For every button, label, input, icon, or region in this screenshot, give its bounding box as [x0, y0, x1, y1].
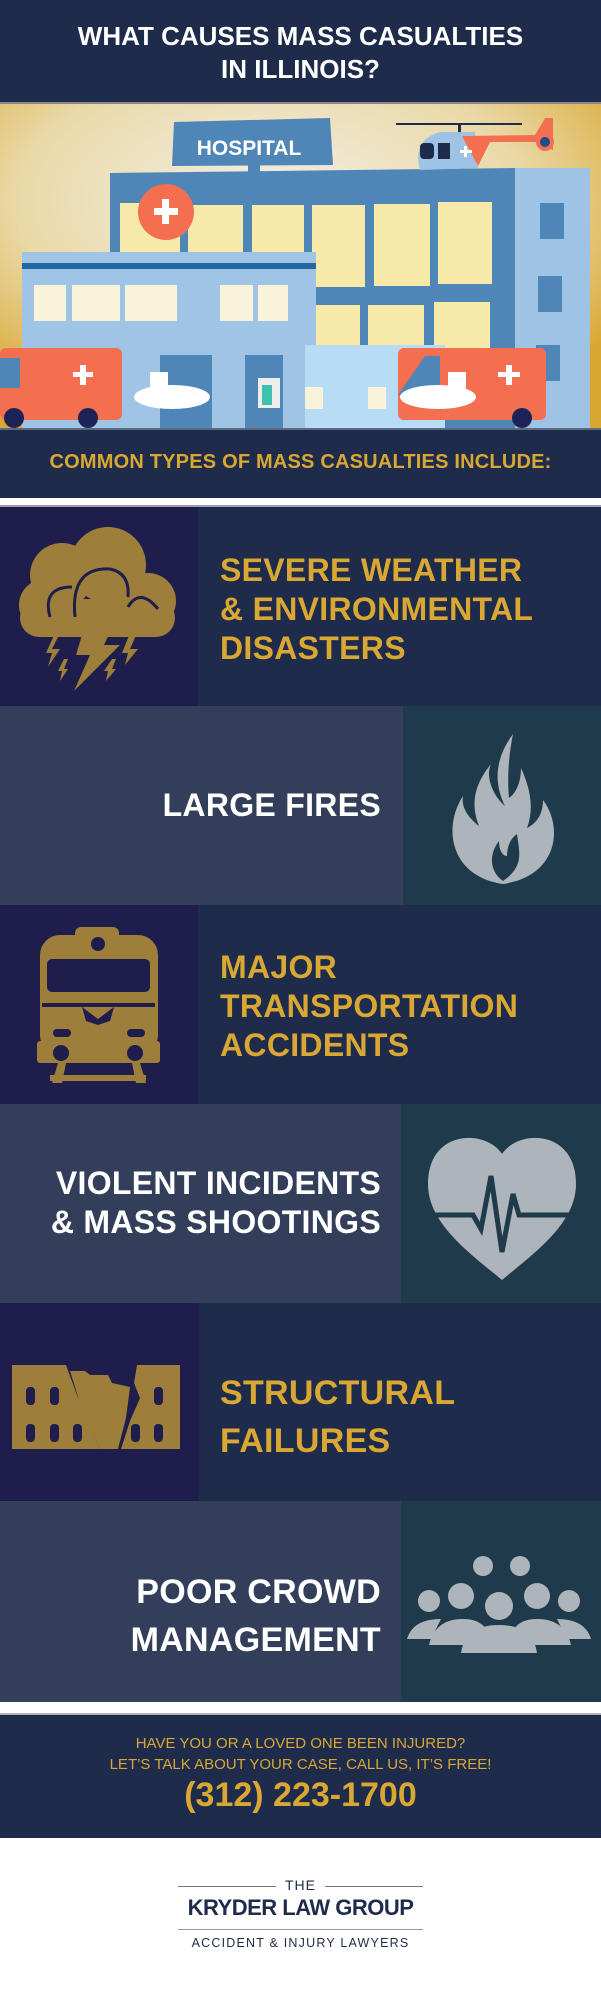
- cta text: LET’S TALK ABOUT YOUR CASE, CALL US, IT’S FREE!: [110, 1756, 491, 1773]
- text: transportation: MAJOR: [220, 949, 337, 985]
- text: crowd management: POOR CROWD: [136, 1573, 381, 1611]
- helicopter: [396, 123, 522, 125]
- text: severe weather: [220, 552, 533, 666]
- title: IN ILLINOIS?: [221, 54, 380, 84]
- text: violent incidents: VIOLENT INCIDENTS: [56, 1165, 381, 1201]
- logo: ACCIDENT & INJURY LAWYERS: [192, 1936, 409, 1950]
- panel: violent incidents: [0, 1104, 601, 1303]
- text: violent incidents: & MASS SHOOTINGS: [51, 1204, 381, 1240]
- cta text: [110, 1735, 491, 1773]
- cta text: HAVE YOU OR A LOVED ONE BEEN INJURED?: [136, 1735, 465, 1752]
- logo: KRYDER LAW GROUP: [188, 1895, 413, 1920]
- text: transportation: ACCIDENTS: [220, 1027, 409, 1063]
- panel: severe weather: [0, 507, 601, 706]
- text: crowd management: [131, 1573, 381, 1659]
- title: WHAT CAUSES MASS CASUALTIES: [78, 21, 523, 51]
- panel: transportation: [0, 905, 601, 1104]
- panel: poor crowd management: [0, 1501, 601, 1702]
- icon: heart with pulse: [401, 1104, 601, 1303]
- text: severe weather: SEVERE WEATHER: [220, 552, 522, 588]
- hero illustration: hospital: [0, 102, 601, 430]
- hero illustration: hospital: HOSPITAL: [197, 137, 301, 160]
- text: structural failures: [220, 1374, 455, 1460]
- text: large fires: LARGE FIRES: [163, 787, 381, 823]
- text: severe weather: DISASTERS: [220, 630, 406, 666]
- icon: collapsed building: [0, 1303, 199, 1501]
- subheading band: [0, 430, 601, 498]
- icon: fire: [403, 706, 601, 905]
- icon: crowd: [401, 1501, 601, 1702]
- text: severe weather: & ENVIRONMENTAL: [220, 591, 533, 627]
- logo: [178, 1877, 423, 1950]
- title band: [0, 0, 601, 102]
- subheading: COMMON TYPES OF MASS CASUALTIES INCLUDE:: [49, 451, 552, 473]
- text: structural failures: FAILURES: [220, 1422, 391, 1460]
- text: crowd management: MANAGEMENT: [131, 1621, 381, 1659]
- logo: THE: [285, 1877, 316, 1893]
- panel: structural failures: [0, 1303, 601, 1502]
- phone number: (312) 223-1700: [184, 1776, 417, 1814]
- text: structural failures: STRUCTURAL: [220, 1374, 455, 1412]
- text: transportation: TRANSPORTATION: [220, 988, 518, 1024]
- icon: storm cloud: [0, 507, 198, 706]
- title: [78, 21, 523, 84]
- text: transportation: [220, 949, 518, 1063]
- panel: large fires: [0, 706, 601, 905]
- icon: train: [0, 905, 198, 1104]
- text: violent incidents: [51, 1165, 381, 1240]
- call to action band: [0, 1715, 601, 1838]
